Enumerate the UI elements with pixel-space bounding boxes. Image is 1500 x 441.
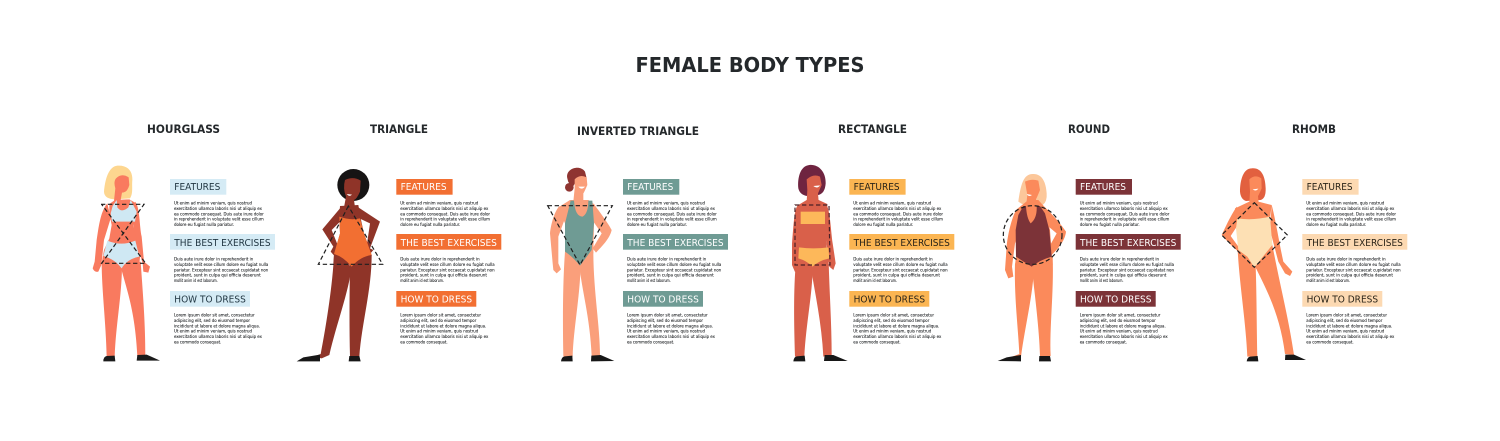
paragraph: how to dress: exercitation ullamco laboris nisi ut aliquip ex — [853, 334, 942, 340]
panel: hourglass — [93, 122, 275, 361]
paragraph: features — [174, 201, 264, 228]
paragraph: how to dress — [1080, 313, 1168, 345]
label: the best exercises — [1302, 234, 1407, 250]
panel: round — [998, 122, 1181, 361]
label: features: FEATURES — [174, 182, 220, 193]
paragraph: features: Ut enim ad minim veniam, quis nostrud — [853, 201, 931, 207]
label: how to dress: HOW TO DRESS — [401, 294, 472, 305]
label: features — [849, 179, 906, 195]
paragraph: how to dress — [853, 313, 942, 345]
paragraph: exercises — [1080, 257, 1174, 284]
paragraph: how to dress: ea commodo consequat. — [627, 339, 674, 345]
paragraph: exercises — [174, 257, 269, 284]
paragraph: how to dress — [174, 313, 262, 345]
paragraph: features: exercitation ullamco laboris nisi ut aliquip ex — [400, 206, 489, 212]
paragraph: how to dress: incididunt ut labore et dolore magna aliqua. — [1306, 323, 1392, 329]
paragraph: how to dress: Lorem ipsum dolor sit amet, consectetur — [1080, 313, 1161, 319]
paragraph: how to dress: Lorem ipsum dolor sit amet, consectetur — [1306, 313, 1387, 319]
paragraph: how to dress — [627, 313, 715, 345]
figure: round woman — [998, 174, 1066, 361]
paragraph: how to dress: Lorem ipsum dolor sit amet, consectetur — [400, 313, 481, 319]
label: the best exercises — [396, 234, 501, 250]
label: features — [396, 179, 453, 195]
paragraph: exercises: proident, sunt in culpa qui officia deserunt — [1306, 273, 1393, 279]
paragraph: features: dolore eu fugiat nulla pariatur. — [174, 222, 234, 228]
paragraph: how to dress: exercitation ullamco laboris nisi ut aliquip ex — [1080, 334, 1168, 340]
paragraph: how to dress: incididunt ut labore et dolore magna aliqua. — [627, 323, 713, 329]
paragraph: exercises: voluptate velit esse cillum dolore eu fugiat nulla — [174, 262, 269, 268]
text block: triangle — [396, 179, 501, 345]
label: the best exercises: THE BEST EXERCISES — [1306, 238, 1403, 249]
text block: hourglass — [170, 179, 275, 345]
paragraph: how to dress: Ut enim ad minim veniam, quis nostrud — [400, 329, 478, 335]
paragraph: how to dress: ea commodo consequat. — [400, 339, 448, 345]
paragraph: features: in reprehenderit in voluptate velit esse cillum — [1080, 217, 1169, 223]
paragraph: how to dress: exercitation ullamco laboris nisi ut aliquip ex — [400, 334, 489, 340]
paragraph: exercises: mollit anim id est laborum. — [400, 278, 444, 284]
paragraph: exercises: Duis aute irure dolor in reprehenderit in — [1080, 257, 1159, 263]
paragraph: exercises: pariatur. Excepteur sint occaecat cupidatat non — [1306, 267, 1401, 273]
figure: rectangle woman — [792, 165, 848, 361]
paragraph: exercises: pariatur. Excepteur sint occaecat cupidatat non — [1080, 267, 1174, 273]
label: features — [1302, 179, 1359, 195]
figure: hourglass woman — [93, 166, 160, 361]
label: how to dress: HOW TO DRESS — [174, 294, 246, 305]
paragraph: how to dress: adipiscing elit, sed do eiusmod tempor — [174, 318, 250, 324]
paragraph: exercises: mollit anim id est laborum. — [1080, 278, 1123, 284]
heading: triangle: TRIANGLE — [370, 122, 428, 136]
paragraph: how to dress: ea commodo consequat. — [174, 339, 221, 345]
paragraph: features: Ut enim ad minim veniam, quis nostrud — [174, 201, 252, 207]
label: how to dress: HOW TO DRESS — [1080, 294, 1151, 305]
paragraph: features: dolore eu fugiat nulla pariatur. — [1306, 222, 1366, 228]
paragraph: exercises: Duis aute irure dolor in reprehenderit in — [400, 257, 480, 263]
label: features: FEATURES — [1080, 182, 1126, 193]
paragraph: features — [1306, 201, 1396, 228]
label: how to dress: HOW TO DRESS — [627, 294, 699, 305]
label: the best exercises: THE BEST EXERCISES — [626, 238, 724, 249]
label: the best exercises — [170, 234, 275, 250]
paragraph: features: in reprehenderit in voluptate velit esse cillum — [1306, 217, 1396, 223]
heading: inverted triangle: INVERTED TRIANGLE — [577, 124, 699, 138]
paragraph: features — [1080, 201, 1170, 228]
paragraph: exercises: Duis aute irure dolor in reprehenderit in — [1306, 257, 1386, 263]
paragraph: how to dress: Lorem ipsum dolor sit amet, consectetur — [627, 313, 708, 319]
paragraph: features — [853, 201, 943, 228]
paragraph: how to dress: adipiscing elit, sed do eiusmod tempor — [400, 318, 476, 324]
paragraph: how to dress: incididunt ut labore et dolore magna aliqua. — [853, 323, 939, 329]
panel: triangle — [297, 122, 501, 361]
paragraph: how to dress: exercitation ullamco laboris nisi ut aliquip ex — [627, 334, 715, 340]
paragraph: how to dress: incididunt ut labore et dolore magna aliqua. — [400, 323, 486, 329]
paragraph: how to dress: ea commodo consequat. — [1080, 339, 1127, 345]
paragraph: how to dress: Lorem ipsum dolor sit amet, consectetur — [174, 313, 255, 319]
paragraph: how to dress: Ut enim ad minim veniam, quis nostrud — [1080, 329, 1158, 335]
paragraph: exercises: mollit anim id est laborum. — [627, 278, 671, 284]
text block: inverted triangle — [623, 179, 728, 345]
paragraph: features: in reprehenderit in voluptate velit esse cillum — [627, 217, 717, 223]
paragraph: features: Ut enim ad minim veniam, quis nostrud — [400, 201, 478, 207]
label: the best exercises — [623, 234, 728, 250]
text block: rhomb — [1302, 179, 1407, 345]
paragraph: exercises: mollit anim id est laborum. — [1306, 278, 1350, 284]
paragraph: exercises: pariatur. Excepteur sint occaecat cupidatat non — [174, 267, 268, 273]
label: how to dress — [1076, 291, 1156, 307]
label: features — [170, 179, 226, 195]
paragraph: features: exercitation ullamco laboris nisi ut aliquip ex — [627, 206, 715, 212]
panel: inverted triangle — [548, 124, 728, 361]
paragraph: how to dress: Ut enim ad minim veniam, quis nostrud — [853, 329, 931, 335]
paragraph: features: in reprehenderit in voluptate velit esse cillum — [400, 217, 490, 223]
paragraph: exercises: voluptate velit esse cillum dolore eu fugiat nulla — [1080, 262, 1174, 268]
label: how to dress — [623, 291, 703, 307]
label: how to dress — [170, 291, 250, 307]
paragraph: how to dress: adipiscing elit, sed do eiusmod tempor — [853, 318, 929, 324]
label: features: FEATURES — [401, 182, 447, 193]
paragraph: features: dolore eu fugiat nulla pariatur. — [627, 222, 687, 228]
paragraph: exercises — [853, 257, 948, 284]
paragraph: how to dress: incididunt ut labore et dolore magna aliqua. — [174, 323, 260, 329]
panel: rhomb — [1222, 122, 1407, 361]
text block: rectangle — [849, 179, 954, 345]
paragraph: how to dress — [400, 313, 489, 345]
paragraph: how to dress — [1306, 313, 1395, 345]
paragraph: features: Ut enim ad minim veniam, quis nostrud — [1306, 201, 1384, 207]
paragraph: features: exercitation ullamco laboris nisi ut aliquip ex — [1080, 206, 1168, 212]
paragraph: exercises: mollit anim id est laborum. — [174, 278, 218, 284]
label: the best exercises — [849, 234, 954, 250]
paragraph: exercises: pariatur. Excepteur sint occaecat cupidatat non — [853, 267, 948, 273]
paragraph: features: in reprehenderit in voluptate velit esse cillum — [853, 217, 943, 223]
paragraph: features — [627, 201, 717, 228]
paragraph: exercises — [1306, 257, 1401, 284]
paragraph: features: ea commodo consequat. Duis aute irure dolor — [627, 211, 717, 217]
paragraph: exercises: Duis aute irure dolor in reprehenderit in — [627, 257, 706, 263]
paragraph: how to dress: incididunt ut labore et dolore magna aliqua. — [1080, 323, 1166, 329]
figure: rhomb woman — [1222, 168, 1306, 361]
paragraph: features: dolore eu fugiat nulla pariatur. — [400, 222, 460, 228]
paragraph: features: in reprehenderit in voluptate velit esse cillum — [174, 217, 264, 223]
paragraph: features: ea commodo consequat. Duis aute irure dolor — [174, 211, 264, 217]
paragraph: features: ea commodo consequat. Duis aute irure dolor — [400, 211, 490, 217]
label: the best exercises: THE BEST EXERCISES — [1079, 238, 1176, 249]
paragraph: how to dress: exercitation ullamco laboris nisi ut aliquip ex — [174, 334, 262, 340]
text block: round — [1076, 179, 1181, 345]
paragraph: how to dress: adipiscing elit, sed do eiusmod tempor — [1080, 318, 1156, 324]
paragraph: features: exercitation ullamco laboris nisi ut aliquip ex — [1306, 206, 1395, 212]
paragraph: how to dress: Ut enim ad minim veniam, quis nostrud — [174, 329, 252, 335]
paragraph: exercises: pariatur. Excepteur sint occaecat cupidatat non — [400, 267, 495, 273]
paragraph: features: dolore eu fugiat nulla pariatur. — [853, 222, 913, 228]
paragraph: features: dolore eu fugiat nulla pariatur. — [1080, 222, 1140, 228]
paragraph: exercises — [400, 257, 495, 284]
label: features: FEATURES — [627, 182, 673, 193]
paragraph: exercises: proident, sunt in culpa qui officia deserunt — [174, 273, 261, 279]
label: how to dress: HOW TO DRESS — [1307, 294, 1378, 305]
heading: hourglass: HOURGLASS — [147, 122, 220, 136]
paragraph: exercises: pariatur. Excepteur sint occaecat cupidatat non — [627, 267, 721, 273]
heading: rectangle: RECTANGLE — [838, 122, 907, 136]
paragraph: how to dress: adipiscing elit, sed do eiusmod tempor — [627, 318, 703, 324]
paragraph: how to dress: Ut enim ad minim veniam, quis nostrud — [627, 329, 705, 335]
paragraph: features: exercitation ullamco laboris nisi ut aliquip ex — [853, 206, 942, 212]
paragraph: features — [400, 201, 490, 228]
paragraph: exercises: Duis aute irure dolor in reprehenderit in — [853, 257, 933, 263]
paragraph: how to dress: ea commodo consequat. — [853, 339, 901, 345]
paragraph: how to dress: exercitation ullamco laboris nisi ut aliquip ex — [1306, 334, 1395, 340]
label: features: FEATURES — [1307, 182, 1353, 193]
paragraph: features: ea commodo consequat. Duis aute irure dolor — [1306, 211, 1396, 217]
label: features: FEATURES — [854, 182, 900, 193]
label: how to dress — [396, 291, 476, 307]
figure: triangle woman — [297, 169, 383, 361]
paragraph: features: Ut enim ad minim veniam, quis nostrud — [1080, 201, 1158, 207]
paragraph: how to dress: Lorem ipsum dolor sit amet, consectetur — [853, 313, 934, 319]
label: the best exercises — [1076, 234, 1181, 250]
paragraph: exercises: proident, sunt in culpa qui officia deserunt — [1080, 273, 1167, 279]
label: features — [623, 179, 679, 195]
figure: inverted triangle woman — [548, 168, 614, 361]
paragraph: exercises: proident, sunt in culpa qui officia deserunt — [853, 273, 940, 279]
paragraph: exercises: mollit anim id est laborum. — [853, 278, 897, 284]
paragraph: exercises: Duis aute irure dolor in reprehenderit in — [174, 257, 253, 263]
paragraph: features: exercitation ullamco laboris nisi ut aliquip ex — [174, 206, 262, 212]
label: how to dress — [849, 291, 929, 307]
paragraph: exercises: proident, sunt in culpa qui officia deserunt — [627, 273, 714, 279]
label: the best exercises: THE BEST EXERCISES — [173, 238, 271, 249]
paragraph: how to dress: ea commodo consequat. — [1306, 339, 1354, 345]
label: how to dress: HOW TO DRESS — [854, 294, 925, 305]
paragraph: exercises: voluptate velit esse cillum dolore eu fugiat nulla — [853, 262, 948, 268]
paragraph: exercises: proident, sunt in culpa qui officia deserunt — [400, 273, 487, 279]
label: the best exercises: THE BEST EXERCISES — [400, 238, 497, 249]
paragraph: exercises: voluptate velit esse cillum dolore eu fugiat nulla — [400, 262, 495, 268]
heading: round: ROUND — [1068, 122, 1110, 136]
paragraph: exercises: voluptate velit esse cillum dolore eu fugiat nulla — [1306, 262, 1401, 268]
paragraph: features: ea commodo consequat. Duis aute irure dolor — [853, 211, 943, 217]
paragraph: how to dress: Ut enim ad minim veniam, quis nostrud — [1306, 329, 1384, 335]
label: how to dress — [1302, 291, 1382, 307]
label: features — [1076, 179, 1132, 195]
paragraph: features: ea commodo consequat. Duis aute irure dolor — [1080, 211, 1170, 217]
paragraph: features: Ut enim ad minim veniam, quis nostrud — [627, 201, 705, 207]
title: FEMALE BODY TYPES — [636, 53, 864, 77]
paragraph: exercises — [627, 257, 722, 284]
paragraph: exercises: voluptate velit esse cillum dolore eu fugiat nulla — [627, 262, 722, 268]
heading: rhomb: RHOMB — [1292, 122, 1336, 136]
panel: rectangle — [792, 122, 954, 361]
label: the best exercises: THE BEST EXERCISES — [853, 238, 950, 249]
paragraph: how to dress: adipiscing elit, sed do eiusmod tempor — [1306, 318, 1382, 324]
